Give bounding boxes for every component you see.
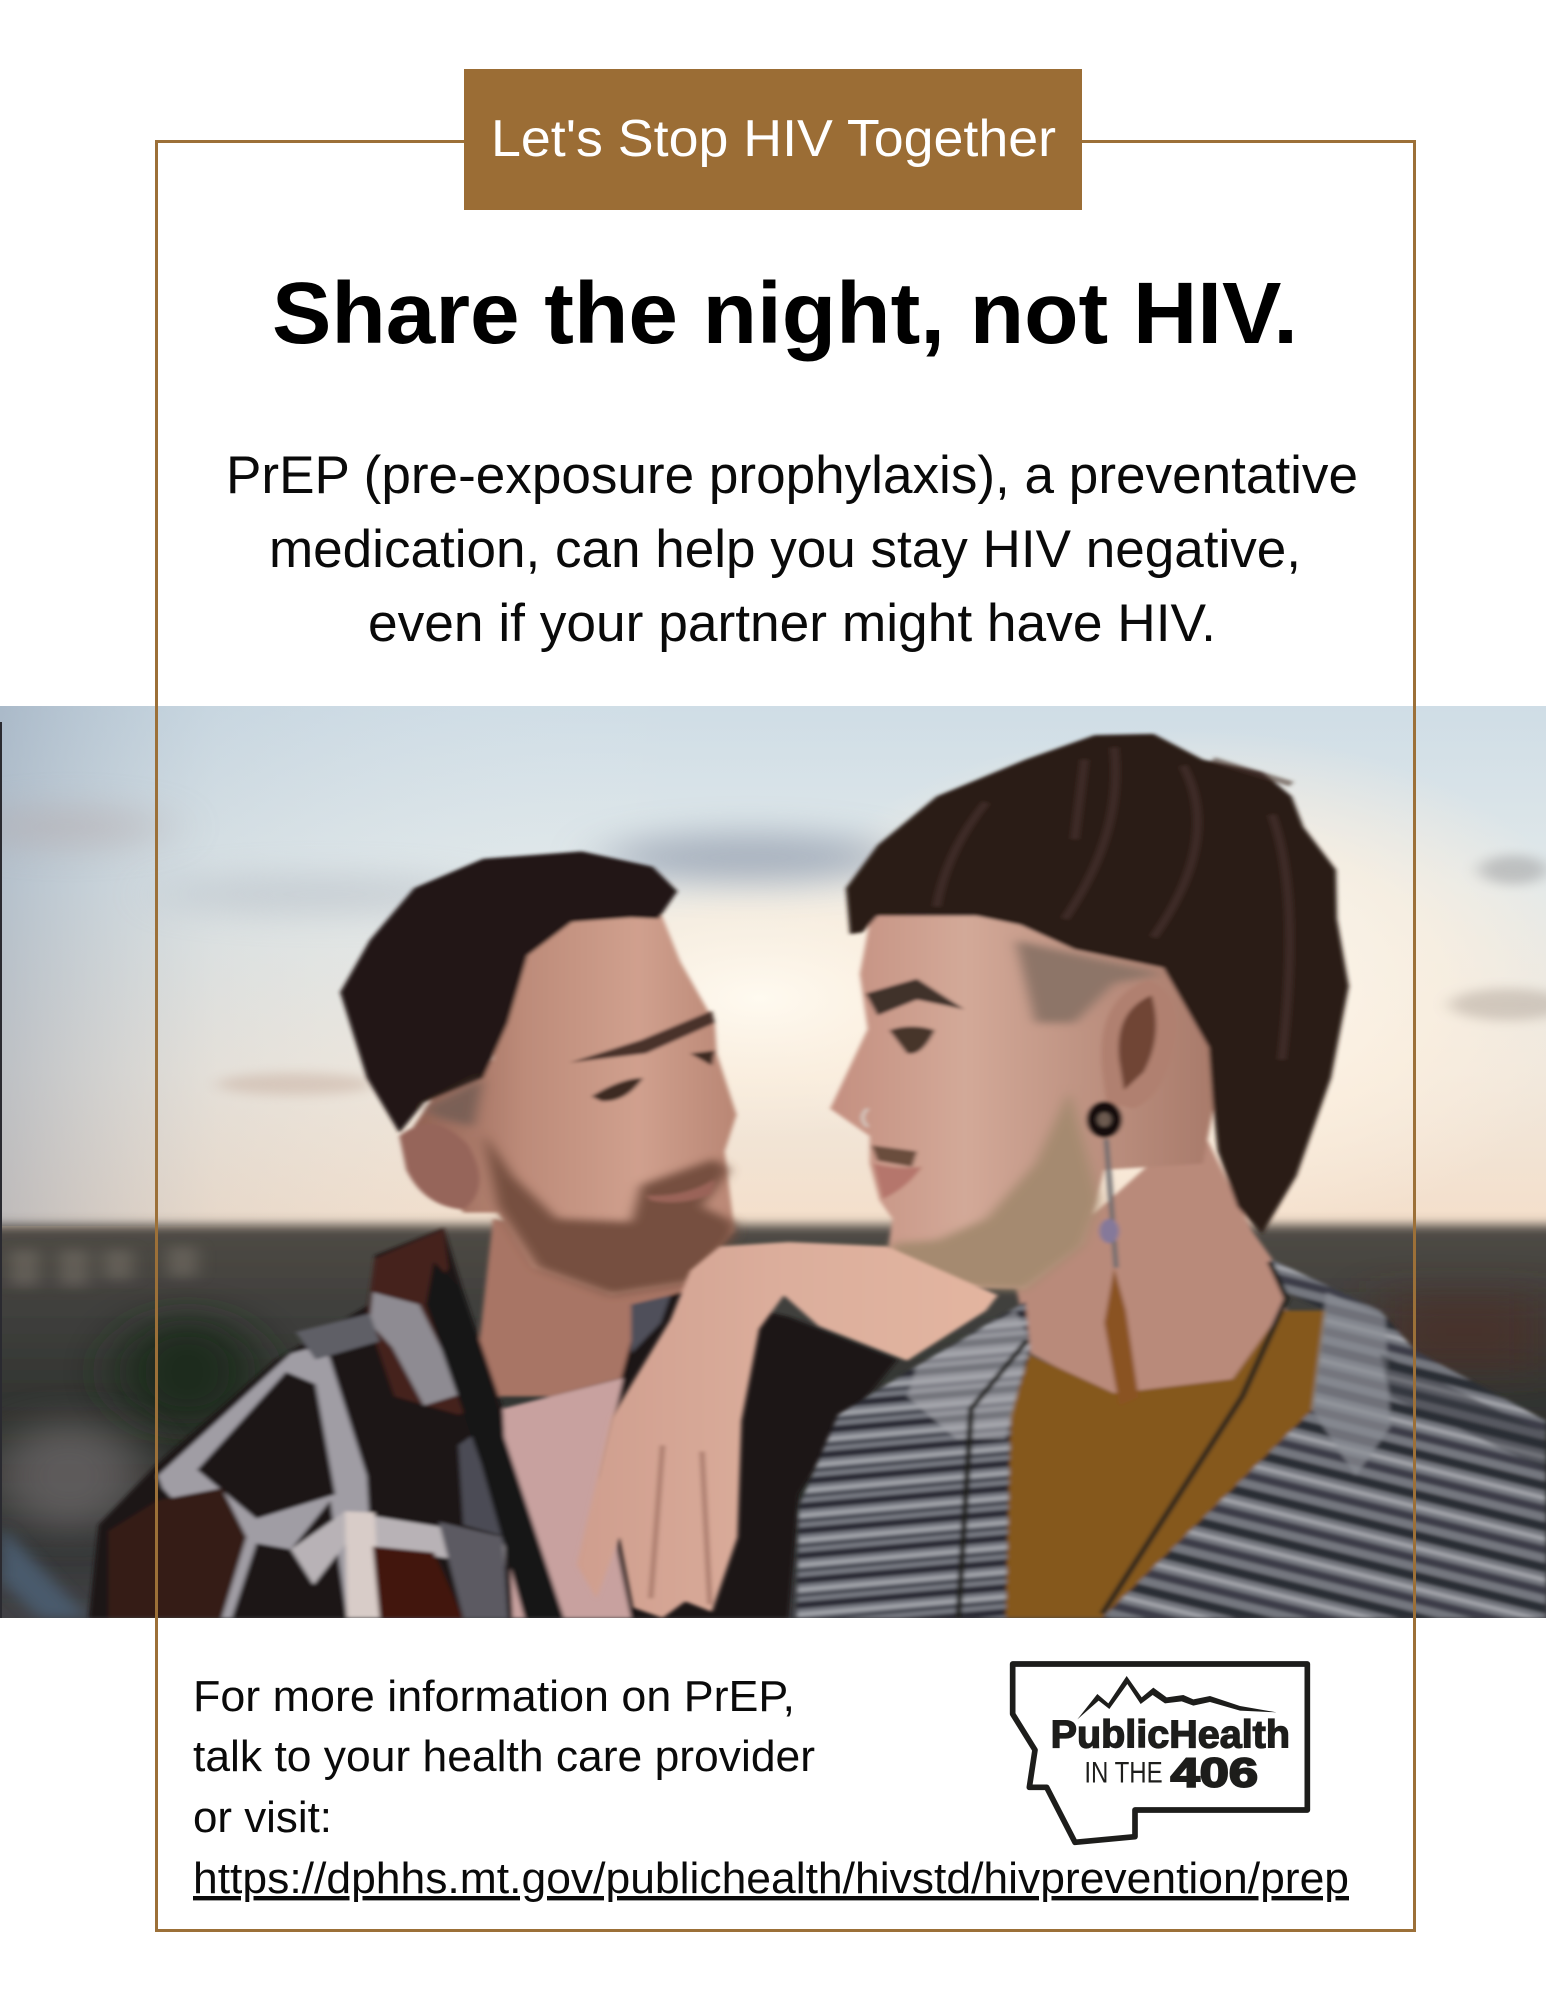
body paragraph xyxy=(226,446,1358,653)
title band xyxy=(464,69,1082,210)
logo: Public Health in the 406: IN THE xyxy=(1084,1757,1163,1790)
right man patterned shirt xyxy=(797,1259,1546,1618)
sky background xyxy=(0,706,1546,1243)
mountain line xyxy=(1077,1676,1277,1719)
right man mouth xyxy=(872,1145,917,1167)
left man ear xyxy=(399,1124,480,1210)
left man mouth xyxy=(646,1179,715,1202)
left man face xyxy=(409,913,737,1295)
left man pink tee xyxy=(503,1378,631,1618)
right man neck xyxy=(1016,1121,1287,1396)
hair strands xyxy=(937,747,1292,1060)
right man shaved temple xyxy=(1016,940,1163,1023)
left man neck xyxy=(473,1219,710,1396)
nose ring xyxy=(863,1109,868,1127)
Montana outline xyxy=(1013,1664,1307,1842)
footer information text: or visit: xyxy=(193,1793,332,1842)
footer information text: talk to your health care provider xyxy=(193,1732,815,1781)
footer information text: For more information on PrEP, xyxy=(193,1672,795,1721)
footer information text: https://dphhs.mt.gov/publichealth/hivstd/hivprevention/prep xyxy=(193,1854,1349,1903)
right man face xyxy=(830,900,1215,1289)
left man hair xyxy=(340,851,677,1133)
logo: Public Health in the 406 xyxy=(1013,1664,1307,1842)
ear plug and earring xyxy=(1087,1101,1139,1406)
right man eyebrow and eye xyxy=(866,979,964,1016)
man on left xyxy=(89,851,897,1618)
lanyard strap xyxy=(426,1262,564,1618)
frame border xyxy=(156,142,1414,1930)
footer information text xyxy=(193,1672,1349,1903)
photo: two men at sunset on a rooftop xyxy=(0,706,1546,1641)
left man's arm and hand xyxy=(577,1242,998,1618)
left man eye and brow xyxy=(570,1011,715,1063)
left man plaid shirt xyxy=(89,1228,897,1618)
body paragraph: medication, can help you stay HIV negative, xyxy=(269,520,1301,579)
left man beard xyxy=(483,1133,735,1295)
man on right xyxy=(797,734,1546,1618)
headline: Share the night, not HIV. xyxy=(272,265,1298,362)
right man hair xyxy=(846,734,1349,1234)
body paragraph: PrEP (pre-exposure prophylaxis), a preventative xyxy=(226,446,1358,505)
blurred city skyline xyxy=(0,1225,1546,1641)
logo: Public Health in the 406: 406 xyxy=(1171,1750,1258,1796)
body paragraph: even if your partner might have HIV. xyxy=(368,594,1216,653)
right man ear xyxy=(1102,989,1142,1107)
title band: Let's Stop HIV Together xyxy=(491,110,1056,168)
dark scan edge xyxy=(0,722,2,1618)
right man beard xyxy=(887,1090,1099,1290)
mustard tee xyxy=(1006,1311,1326,1618)
logo wordmark: PublicHealth xyxy=(1051,1712,1290,1756)
necklace and chain xyxy=(958,1262,1287,1618)
